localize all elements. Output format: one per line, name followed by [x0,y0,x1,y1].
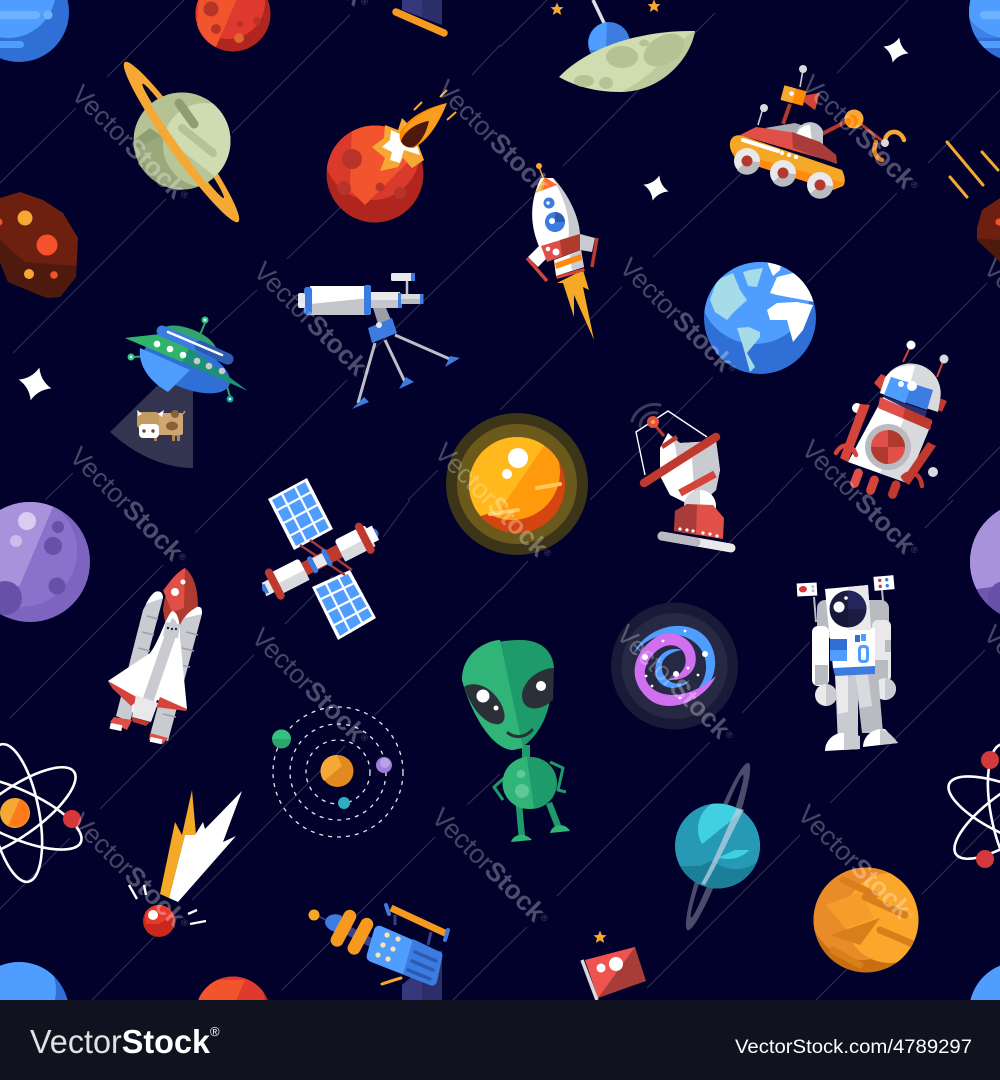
legs [835,674,858,745]
star white middle [640,172,672,204]
space station [255,478,386,640]
planet: cyan ringed [675,762,760,930]
watermarks: VectorStock [431,74,556,199]
watermarks: VectorStock [66,79,191,204]
europe and africa [770,273,814,302]
atom left [0,740,91,886]
speed dashes [947,142,998,197]
watermarks: ® [178,917,190,929]
star white left [14,363,56,405]
watermarks: VectorStock [64,441,189,566]
planet: blue top-left [0,0,69,62]
watermarks: VectorStock [429,437,554,562]
watermarks: VectorStock [792,799,917,924]
earth [704,262,816,374]
planet: blue bottom-right [960,942,1000,1062]
asteroid left [0,192,78,300]
asteroid right [977,192,1000,300]
boosters [116,591,163,722]
alien [462,640,570,842]
cow [137,410,185,441]
ufo abducting a cow [110,316,248,468]
satellite dish [632,404,731,548]
planet: purple left [0,495,90,622]
watermarks: VectorStock [66,807,191,932]
pack and arms [817,600,889,638]
galaxy [611,602,738,730]
fuel tank [163,568,198,650]
sun [446,413,588,555]
watermarks: ® [176,551,188,563]
star gold left [550,2,564,15]
outer blue arm [633,626,715,697]
raygun handle top [396,0,444,33]
comet [129,790,242,937]
watermarks: VectorStock [796,69,921,194]
helmet [825,585,871,631]
inner blue arm [655,649,690,688]
star gold right [648,0,660,12]
solar panel bottom [312,570,376,640]
watermarks: ® [726,362,738,374]
star white top right [880,34,912,66]
rocket [527,163,597,340]
planet: red with comet impact [324,90,456,222]
watermarks: ® [360,366,372,378]
head [462,640,554,750]
watermarks: VectorStock [426,802,551,927]
planet: blue bottom-left [0,942,69,1062]
beam [110,380,193,468]
planet: purple right [965,495,1000,622]
legs [519,803,558,838]
watermarks: ® [358,732,370,744]
planet: orange [814,868,918,972]
astronaut [797,575,898,751]
watermarks: ® [908,544,920,556]
torso [829,628,875,668]
watermarks: ® [908,179,920,191]
flags [814,590,884,622]
telescope [298,273,460,409]
explosion [372,118,424,171]
atom right [939,740,1000,886]
watermarks: VectorStock [796,434,921,559]
watermarks: ® [543,184,555,196]
solar panel top [268,478,333,550]
rover [730,65,904,199]
watermarks: ® [904,909,916,921]
planet: red top [191,0,270,52]
raygun [308,905,448,1000]
boots [825,733,860,751]
purple arm [635,633,716,706]
watermarks: ® [541,547,553,559]
flag with star [582,930,646,1000]
planet: red bottom [191,965,270,1052]
watermarks: ® [178,189,190,201]
footer image id: VectorStock.com/4789297 [735,1036,972,1058]
planet: green ringed [124,62,240,222]
watermarks: ® [538,912,550,924]
watermarks: VectorStock [611,619,736,744]
watermarks: VectorStock [248,256,373,381]
watermarks: VectorStock [614,252,739,377]
planet: blue top-right [960,0,1000,62]
robot [836,340,948,500]
solar system [272,707,403,837]
footer registered mark: ® [210,1024,220,1039]
comet [400,103,447,148]
footer bar [0,1000,1000,1080]
moon ufo top [559,0,695,92]
shuttle [108,568,202,744]
watermarks: ® [723,729,735,741]
americas [710,273,747,320]
footer logo: VectorStock [30,1023,211,1060]
orbiter [108,611,187,720]
watermarks: VectorStock [246,622,371,747]
arms [494,762,566,800]
